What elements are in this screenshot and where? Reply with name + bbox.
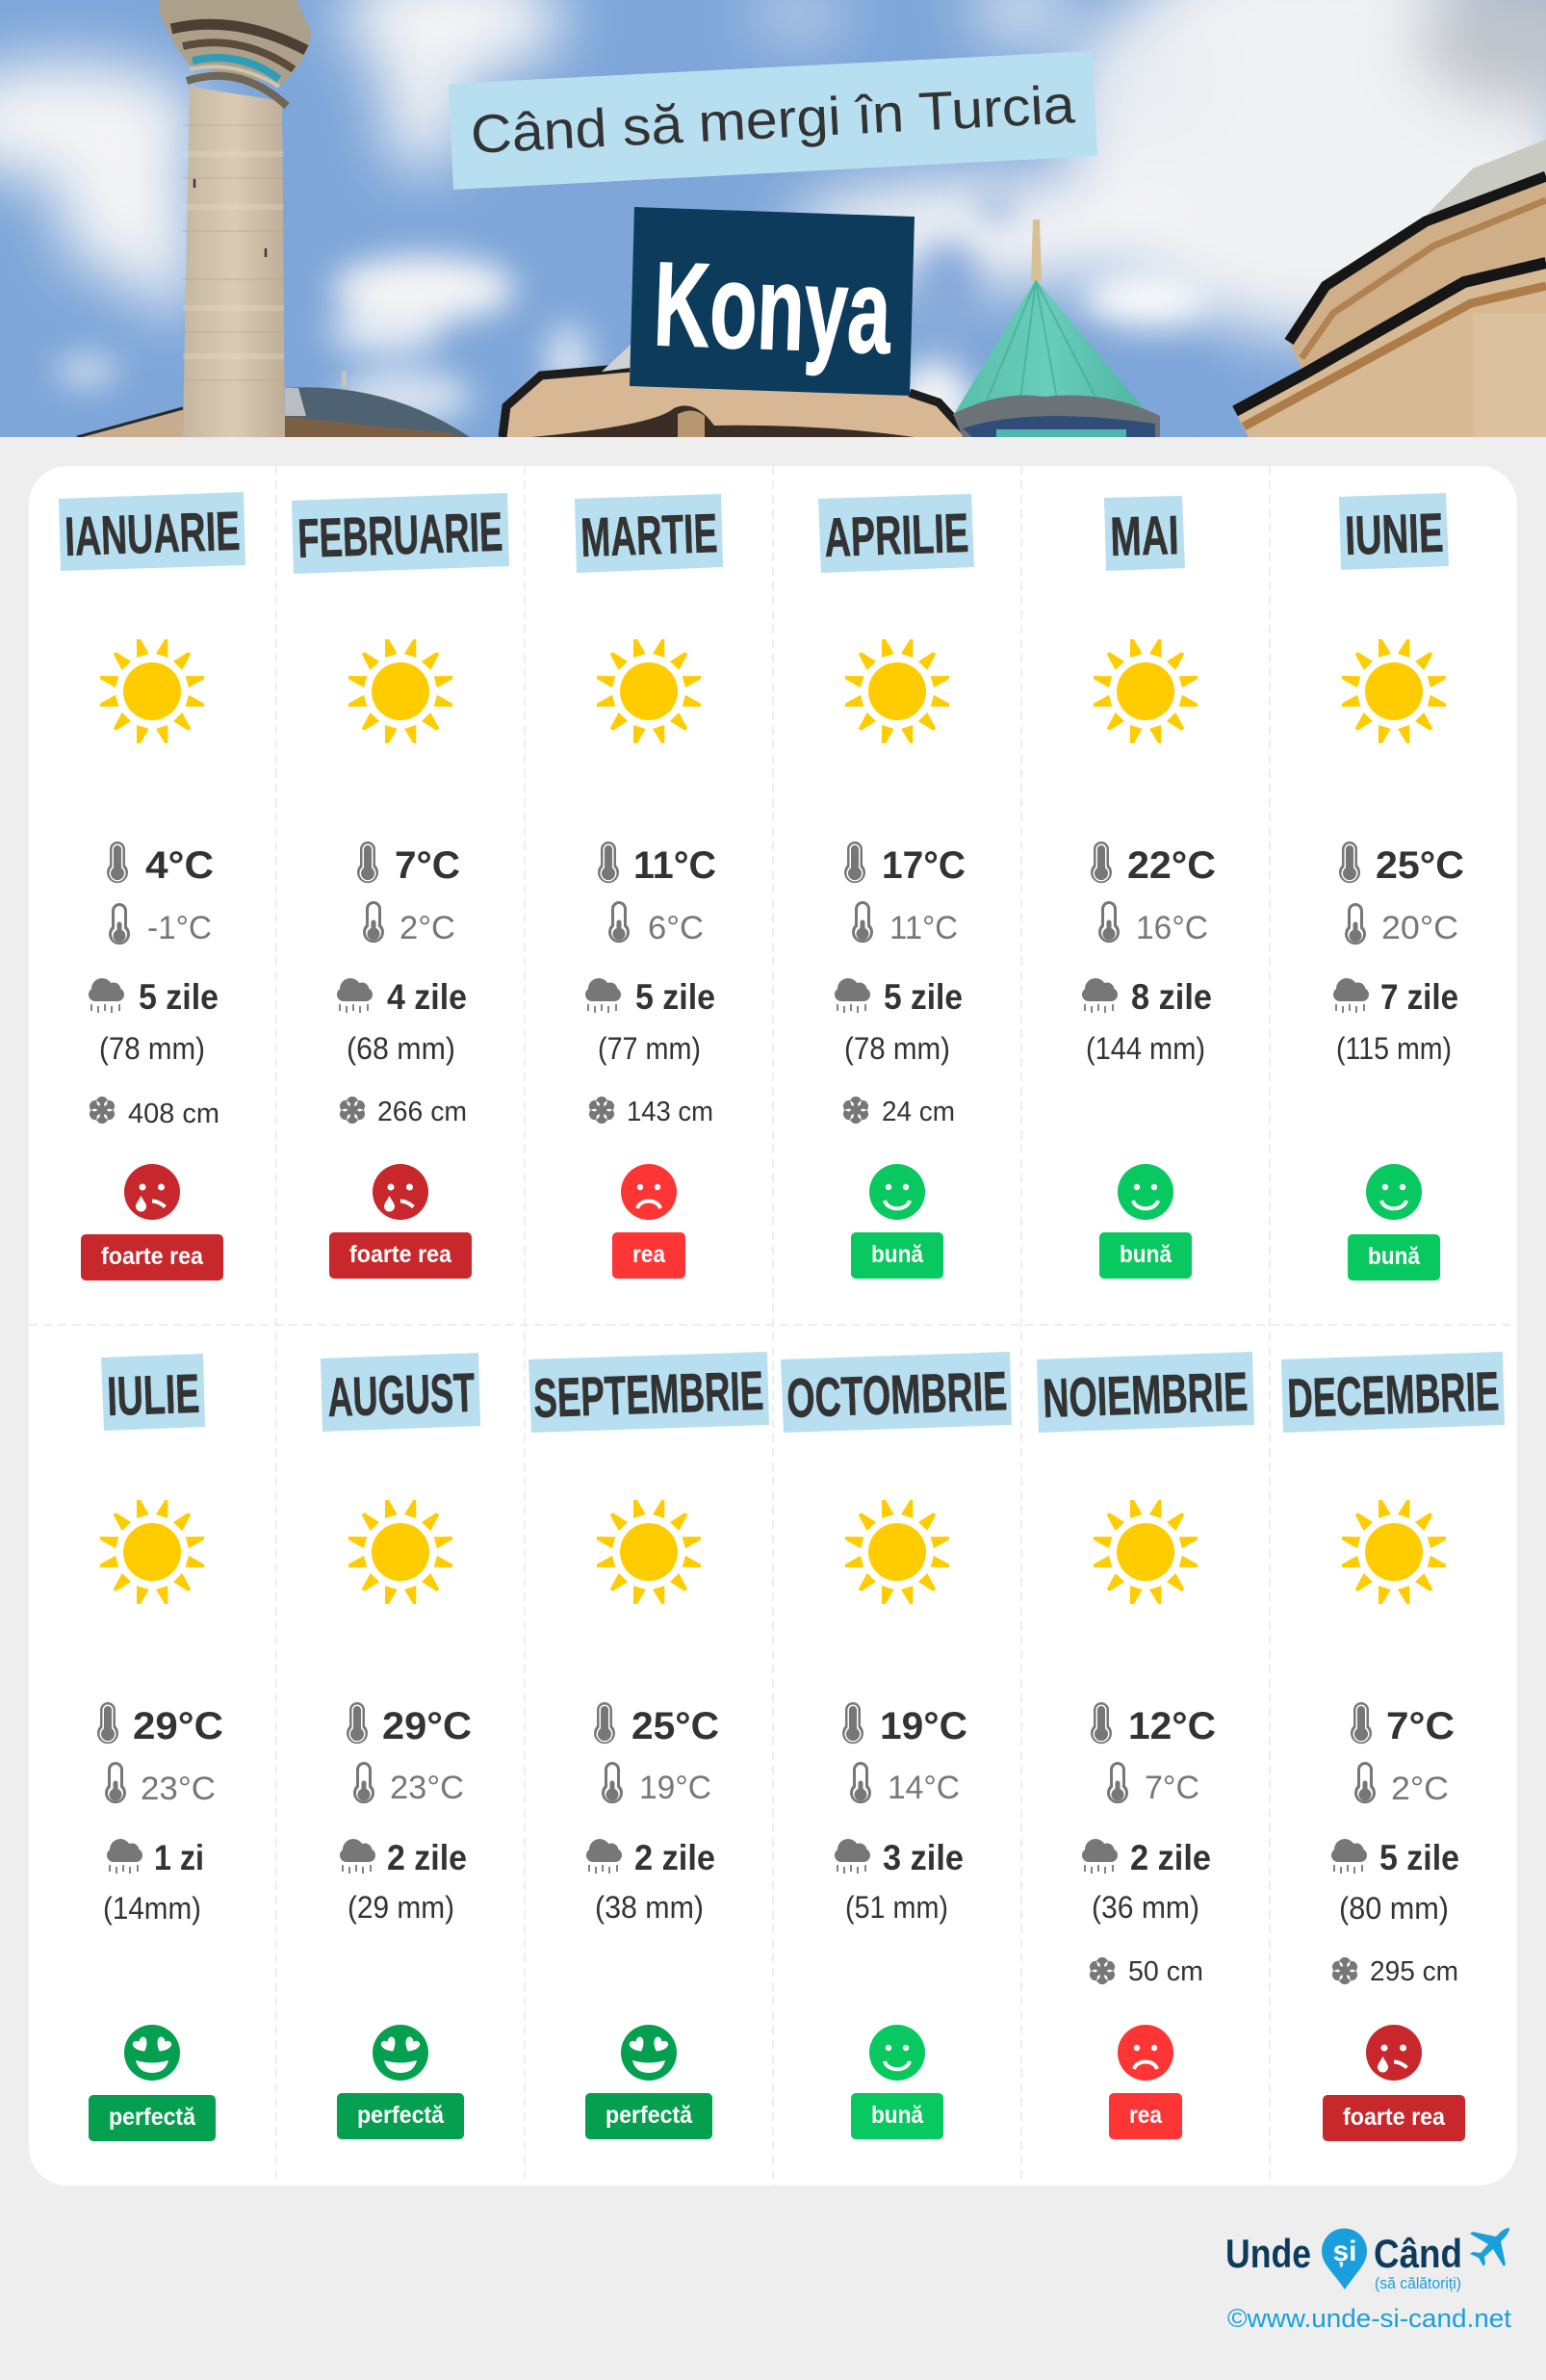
min temperature: -1°C (147, 910, 212, 946)
rainfall: (68 mm) (347, 1031, 455, 1066)
month heading (292, 493, 509, 574)
snow depth: 295 cm (1370, 1956, 1458, 1987)
left building and dome (83, 410, 183, 437)
rainy days: 2 zile (387, 1838, 467, 1877)
rainy days: 7 zile (1380, 977, 1458, 1017)
snow depth: 50 cm (1128, 1956, 1203, 1987)
snow depth: 408 cm (128, 1099, 219, 1129)
panel: ianuarie (59, 492, 245, 1281)
min temperature (363, 901, 455, 946)
rating badge (81, 1234, 223, 1281)
rainy days (835, 1838, 964, 1877)
rainfall: (78 mm) (99, 1031, 205, 1066)
rating badge: foarte rea (101, 1243, 204, 1270)
icon: heart eyes face (124, 2025, 180, 2081)
turquoise cone and drum (1031, 220, 1042, 281)
rainfall: (36 mm) (1092, 1890, 1199, 1925)
min temperature: 2°C (399, 910, 455, 946)
month heading (1104, 496, 1185, 571)
month heading: AUGUST (326, 1362, 476, 1429)
max temperature: 22°C (1127, 844, 1216, 887)
rainy days (586, 1838, 715, 1877)
rating badge: bună (1120, 1241, 1172, 1268)
icon: sun (348, 639, 452, 743)
max temperature: 25°C (631, 1705, 719, 1747)
header photo: Konya mosque and sky (0, 0, 1546, 448)
snow depth (1331, 1956, 1458, 1987)
min temperature (602, 1762, 711, 1806)
icon: crying face (124, 1164, 180, 1220)
max temperature (97, 1702, 223, 1747)
rainy days (107, 1838, 204, 1877)
rating badge: perfectă (109, 2104, 196, 2131)
rating badge: bună (1368, 1243, 1421, 1270)
icon: sun (1342, 1500, 1446, 1604)
icon: sun (597, 639, 701, 743)
city label: Konya (630, 207, 915, 396)
rating badge (585, 2093, 712, 2139)
min temperature (608, 901, 704, 946)
rainy days (337, 977, 467, 1017)
rating badge: foarte rea (1343, 2104, 1446, 2131)
min temperature (105, 1762, 216, 1807)
snow depth (89, 1097, 219, 1129)
rainy days: 3 zile (883, 1838, 964, 1877)
icon: sun (1342, 639, 1446, 743)
rainfall: (144 mm) (1086, 1031, 1205, 1066)
max temperature (598, 841, 716, 887)
icon: crying face (373, 1164, 428, 1220)
rainfall: (115 mm) (1336, 1031, 1452, 1066)
rainy days: 2 zile (1130, 1838, 1211, 1877)
rating badge (89, 2095, 216, 2141)
month heading: IULIE (106, 1363, 200, 1428)
max temperature (594, 1702, 719, 1747)
rainfall: (77 mm) (598, 1031, 701, 1066)
max temperature: 25°C (1376, 844, 1464, 887)
snow depth (842, 1097, 955, 1127)
month heading (59, 492, 245, 571)
rainy days (1333, 977, 1458, 1017)
max temperature (1351, 1702, 1455, 1747)
max temperature: 7°C (1386, 1705, 1455, 1747)
logo: Unde și Când: Când (1374, 2231, 1462, 2276)
rainfall: (14mm) (103, 1891, 201, 1926)
icon: map pin (1322, 2228, 1367, 2289)
icon: sun (597, 1500, 701, 1604)
rainy days (89, 977, 219, 1017)
month heading (528, 1352, 769, 1433)
rainfall: (29 mm) (348, 1890, 454, 1925)
min temperature: 7°C (1145, 1770, 1199, 1806)
rating badge (1099, 1232, 1192, 1279)
rainy days (340, 1838, 467, 1877)
min temperature: 23°C (141, 1771, 216, 1807)
min temperature: 19°C (639, 1770, 711, 1806)
month heading: IANUARIE (64, 501, 241, 568)
min temperature (109, 903, 212, 946)
rainfall: (51 mm) (845, 1890, 948, 1925)
month heading: FEBRUARIE (296, 502, 503, 570)
month heading: SEPTEMBRIE (532, 1360, 764, 1430)
rainfall: (38 mm) (595, 1890, 704, 1925)
icon: crying face (1366, 2025, 1422, 2081)
logo: Unde și Când (1225, 2228, 1509, 2292)
min temperature: 16°C (1136, 910, 1208, 946)
center building (502, 368, 971, 437)
rating badge: bună (871, 1241, 924, 1268)
max temperature (1091, 841, 1216, 887)
icon: sun (1094, 639, 1198, 743)
icon: smiling face (869, 1164, 925, 1220)
min temperature (852, 901, 958, 946)
rainy days: 5 zile (139, 977, 219, 1017)
month heading (781, 1352, 1012, 1433)
rainfall: (80 mm) (1339, 1891, 1449, 1926)
rainy days: 5 zile (1379, 1838, 1459, 1877)
min temperature: 20°C (1381, 910, 1458, 946)
panel: februarie (292, 493, 509, 1279)
rating badge: perfectă (606, 2102, 693, 2129)
rating badge: perfectă (357, 2102, 445, 2129)
max temperature (1091, 1702, 1216, 1747)
title ribbon: Când să mergi în Turcia (449, 51, 1097, 190)
rainy days: 2 zile (634, 1838, 715, 1877)
min temperature (1098, 901, 1208, 946)
max temperature (842, 1702, 967, 1747)
max temperature: 12°C (1128, 1705, 1216, 1747)
min temperature (850, 1762, 960, 1806)
panel: mai (1082, 496, 1216, 1279)
rating badge (1348, 1234, 1440, 1281)
rating badge (612, 1232, 685, 1279)
rainy days (835, 977, 963, 1017)
snow depth: 24 cm (882, 1097, 955, 1127)
max temperature: 11°C (633, 844, 716, 887)
panel: octombrie (781, 1352, 1012, 2139)
rainy days (1082, 1838, 1211, 1877)
website credit: ©www.unde-si-cand.net (1227, 2304, 1512, 2333)
icon: sun (845, 1500, 949, 1604)
min temperature (353, 1762, 464, 1806)
icon: smiling face (1366, 1164, 1422, 1220)
max temperature (1339, 841, 1464, 887)
logo: Unde și Când: Unde (1225, 2231, 1311, 2276)
icon: sad face (621, 1164, 677, 1220)
icon: sun (100, 1500, 204, 1604)
logo: Unde și Când: și (1332, 2236, 1357, 2267)
card panel (29, 466, 1517, 2186)
month heading: APRILIE (823, 503, 969, 569)
rainy days (1331, 1838, 1459, 1877)
panel: septembrie (528, 1352, 769, 2139)
min temperature: 11°C (889, 910, 958, 946)
month heading (1339, 493, 1449, 570)
max temperature (844, 841, 966, 887)
max temperature (357, 841, 460, 887)
max temperature (107, 841, 214, 887)
panel: decembrie (1281, 1352, 1505, 2141)
icon: heart eyes face (621, 2025, 677, 2081)
min temperature (1354, 1762, 1449, 1807)
min temperature: 14°C (888, 1770, 960, 1806)
snow depth (588, 1097, 713, 1127)
snow depth (339, 1097, 467, 1127)
icon: sun (100, 639, 204, 743)
minaret (183, 87, 285, 437)
min temperature: 6°C (648, 910, 704, 946)
min temperature (1107, 1762, 1199, 1806)
icon: heart eyes face (373, 2025, 428, 2081)
month heading: MAI (1110, 504, 1179, 568)
rating badge: foarte rea (349, 1241, 452, 1268)
snow depth: 266 cm (377, 1097, 467, 1127)
icon: sun (1094, 1500, 1198, 1604)
icon: smiling face (869, 2025, 925, 2081)
min temperature: 23°C (390, 1770, 464, 1806)
rating badge (851, 1232, 943, 1279)
month heading: MARTIE (580, 503, 718, 569)
rating badge (1109, 2093, 1182, 2139)
max temperature: 19°C (880, 1705, 967, 1747)
icon: sun (348, 1500, 452, 1604)
rating badge: rea (632, 1241, 666, 1268)
title ribbon: Când să mergi în Turcia: Când să mergi în Turcia (469, 73, 1077, 165)
month heading: IUNIE (1344, 502, 1444, 567)
rainy days (585, 977, 715, 1017)
rainy days (1082, 977, 1212, 1017)
logo: Unde și Când: (să călătoriți) (1375, 2274, 1461, 2292)
panel: august (321, 1353, 480, 2139)
icon: airplane (1470, 2228, 1509, 2266)
rating badge (1323, 2095, 1465, 2141)
panel: iulie (89, 1354, 223, 2141)
panel: noiembrie (1037, 1352, 1254, 2139)
rainy days: 8 zile (1131, 977, 1212, 1017)
max temperature: 4°C (145, 844, 214, 887)
max temperature: 17°C (882, 844, 966, 887)
month heading (818, 494, 974, 573)
rainy days: 4 zile (387, 977, 467, 1017)
month heading: OCTOMBRIE (786, 1360, 1008, 1430)
max temperature: 29°C (133, 1705, 223, 1747)
rainy days: 5 zile (635, 977, 715, 1017)
rating badge (851, 2093, 943, 2139)
panel: martie (575, 494, 723, 1279)
max temperature (347, 1702, 472, 1747)
month heading (575, 494, 723, 573)
snow depth: 143 cm (627, 1097, 713, 1127)
icon: sad face (1118, 2025, 1173, 2081)
month heading (101, 1354, 205, 1431)
month heading: NOIEMBRIE (1042, 1361, 1249, 1430)
max temperature: 7°C (395, 844, 460, 887)
rainy days: 5 zile (884, 977, 963, 1017)
panel: aprilie (818, 494, 974, 1279)
rating badge: rea (1129, 2102, 1163, 2129)
month heading (1037, 1352, 1254, 1433)
icon: sun (845, 639, 949, 743)
panel: iunie (1333, 493, 1464, 1281)
rainy days: 1 zi (154, 1838, 204, 1877)
snow depth (1089, 1956, 1203, 1987)
min temperature (1345, 903, 1458, 946)
max temperature: 29°C (382, 1705, 472, 1747)
rating badge: bună (871, 2102, 924, 2129)
rating badge (329, 1232, 472, 1279)
icon: smiling face (1118, 1164, 1173, 1220)
right building (1426, 140, 1546, 216)
month heading (321, 1353, 480, 1432)
city label: Konya: Konya (652, 238, 893, 379)
rainfall: (78 mm) (844, 1031, 950, 1066)
rating badge (337, 2093, 464, 2139)
min temperature: 2°C (1391, 1771, 1449, 1807)
